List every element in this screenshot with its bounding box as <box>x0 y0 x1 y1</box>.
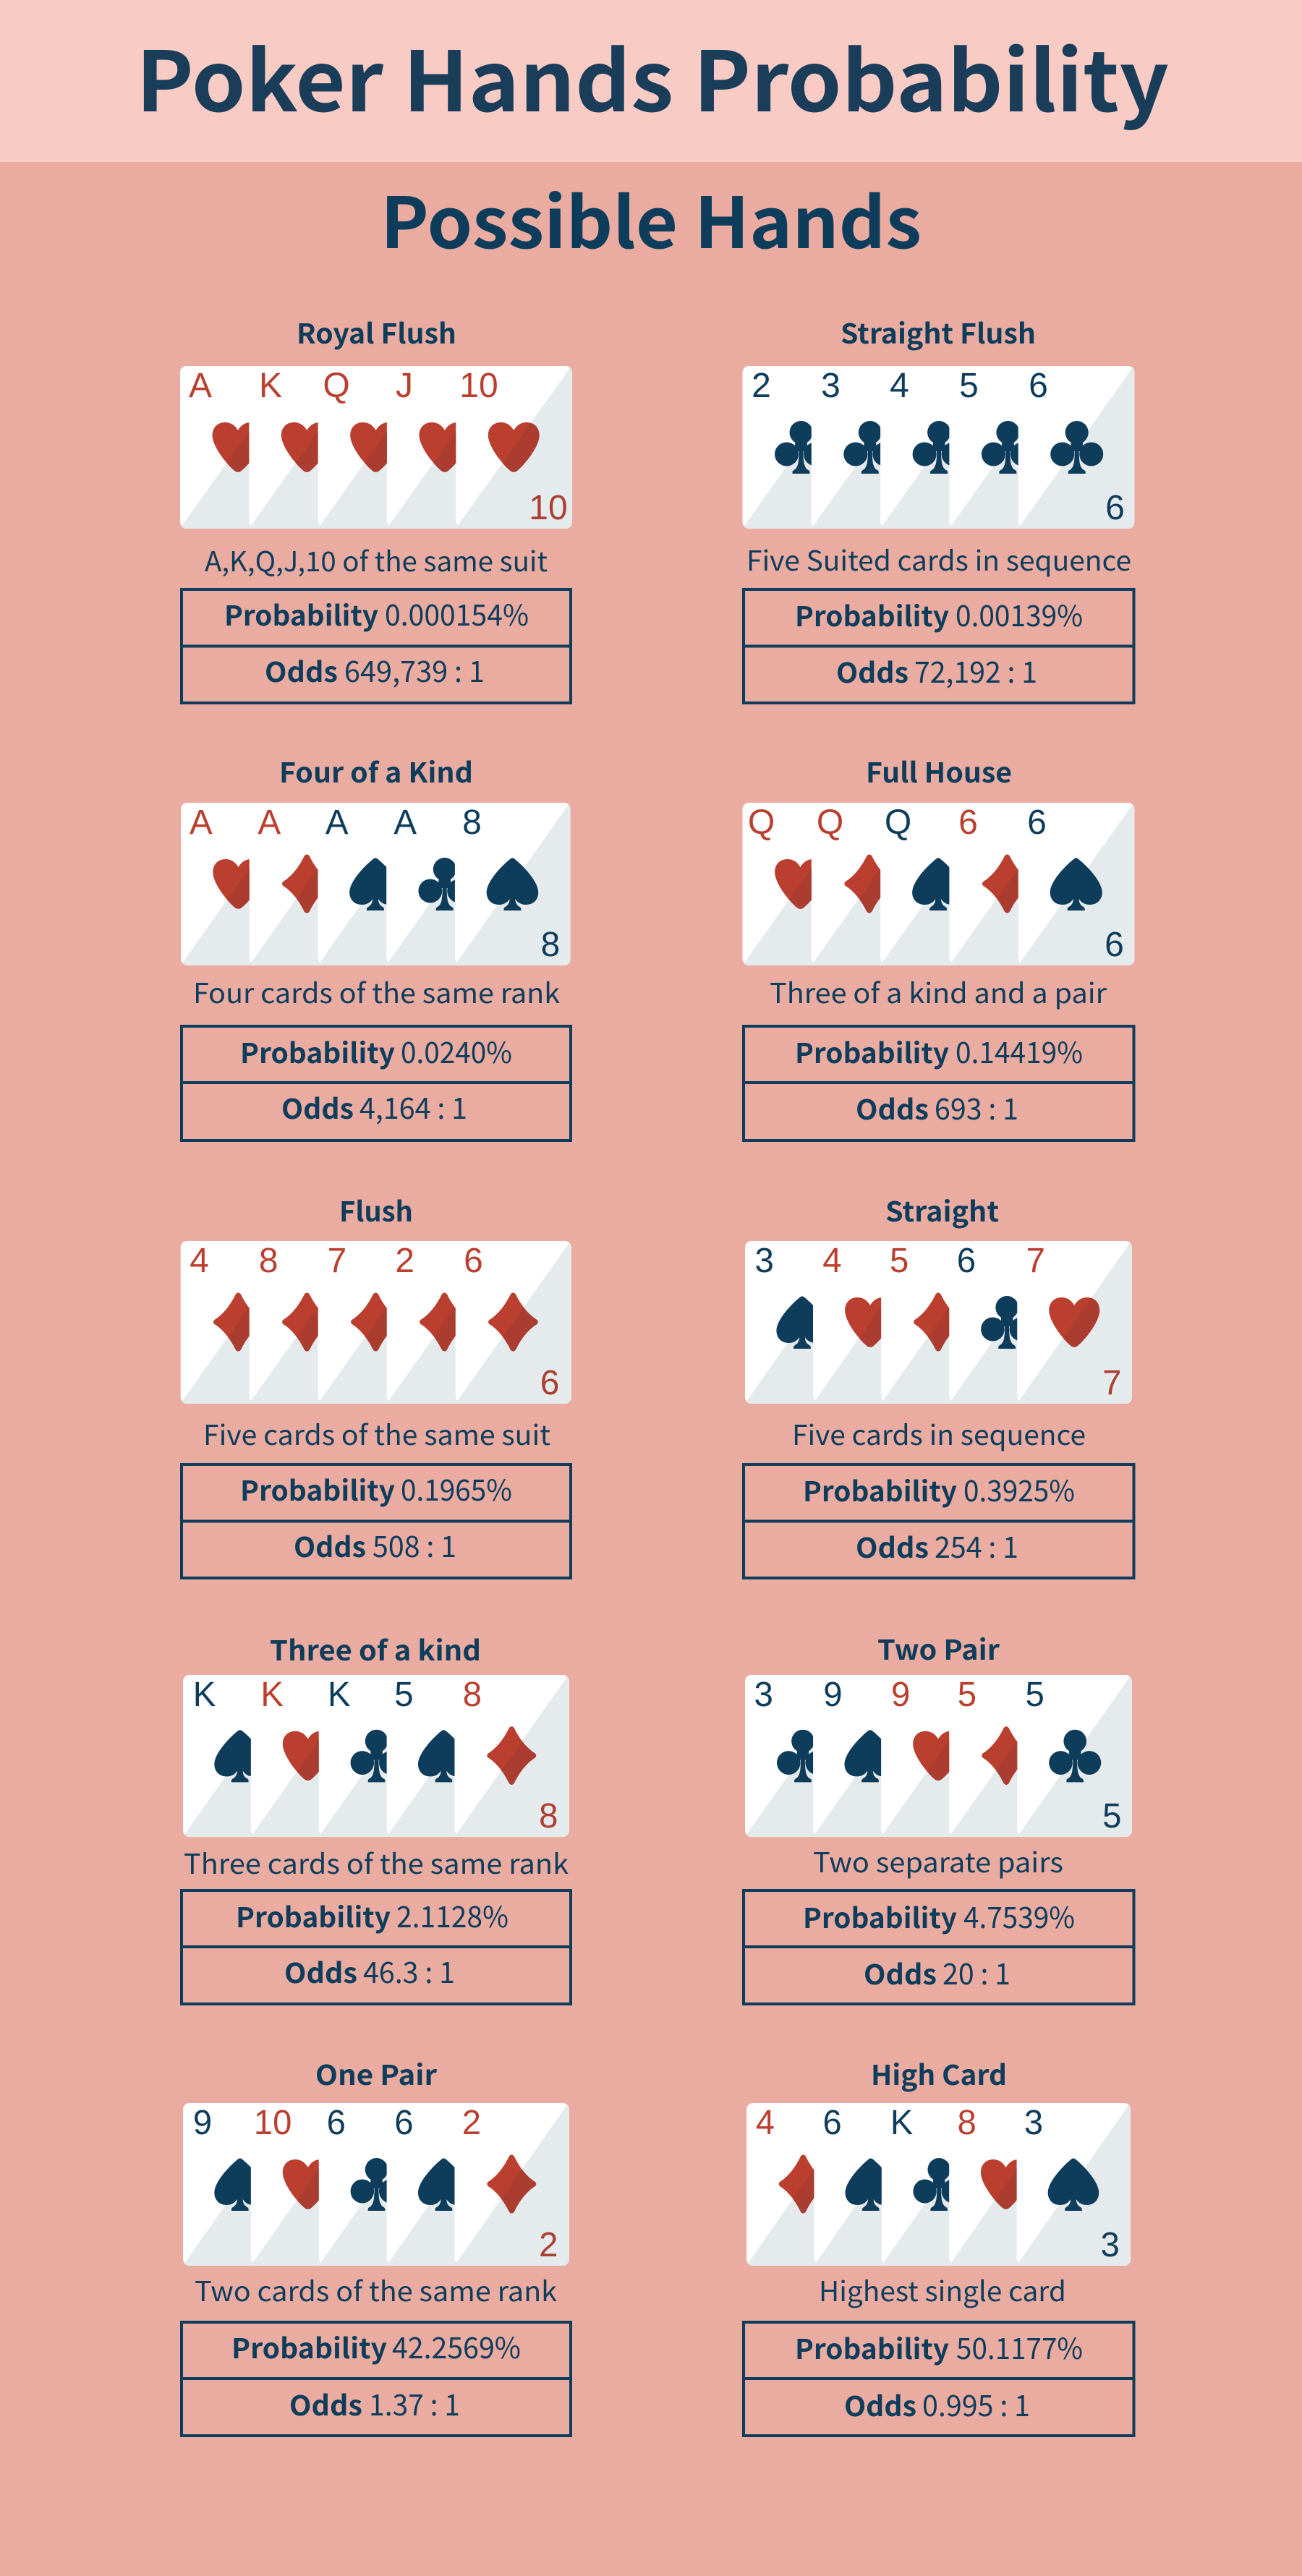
card: 10 of hearts: 10 <box>529 489 568 527</box>
stats table: Odds <box>281 1087 354 1127</box>
stats table: Odds <box>294 1525 366 1565</box>
stats table: 0.14419% <box>956 1029 1083 1072</box>
stats table <box>744 1026 1134 1140</box>
card: A of spades: A <box>326 803 349 842</box>
stats table: 254 : 1 <box>935 1524 1018 1566</box>
card: 9 of spades: 9 <box>823 1676 843 1714</box>
stats table <box>182 1464 571 1578</box>
card: 6 of clubs: 6 <box>1105 489 1125 527</box>
card: K of hearts: K <box>260 1676 284 1714</box>
heading: Straight Flush: Straight Flush <box>841 312 1036 351</box>
card: 4 of clubs <box>890 373 949 474</box>
description: Three cards of the same rank <box>184 1842 569 1882</box>
card: 10 of hearts: 10 <box>459 367 498 405</box>
card: 6 of diamonds: 6 <box>958 803 978 842</box>
card: 6 of spades <box>1027 803 1124 964</box>
panel: Three of a kind <box>182 1629 571 2004</box>
stats table <box>744 1464 1134 1578</box>
card: 4 of diamonds <box>756 2104 827 2213</box>
stats table: 0.00139% <box>956 592 1083 635</box>
card: K of spades <box>195 1682 251 1782</box>
card: 2 of clubs <box>754 373 812 474</box>
section heading: Possible Hands <box>380 166 922 268</box>
stats table: Probability <box>795 594 949 634</box>
stats table: Odds <box>844 2384 916 2424</box>
card: 8 of diamonds <box>260 1248 318 1351</box>
card: A of hearts: A <box>189 367 212 405</box>
stats table <box>744 589 1134 703</box>
card: 4 of clubs: 4 <box>890 367 909 405</box>
card: 6 of spades: 6 <box>822 2104 842 2142</box>
description: Highest single card <box>819 2269 1066 2309</box>
card hand: Royal Flush <box>180 366 572 529</box>
panel: Flush <box>181 1190 571 1578</box>
stats table: Probability <box>240 1031 395 1071</box>
description: Three of a kind and a pair <box>770 971 1107 1011</box>
card: Q of hearts: Q <box>323 367 350 405</box>
card: Q of diamonds: Q <box>817 803 843 842</box>
card: A of hearts: A <box>190 803 213 842</box>
stats table: 0.0240% <box>401 1029 512 1072</box>
description: A,K,Q,J,10 of the same suit <box>205 539 548 579</box>
description: Two separate pairs <box>813 1841 1063 1880</box>
heading: Four of a Kind: Four of a Kind <box>279 751 473 790</box>
card: 7 of diamonds: 7 <box>328 1242 346 1280</box>
card: 9 of hearts: 9 <box>891 1676 910 1714</box>
card: A of spades <box>326 810 386 910</box>
stats table: Odds <box>856 1526 929 1566</box>
stats table: 4,164 : 1 <box>359 1085 467 1127</box>
card: A of clubs <box>393 810 455 910</box>
card: 5 of diamonds: 5 <box>958 1676 977 1714</box>
stats table: Odds <box>864 1953 937 1992</box>
panel: Straight <box>744 1190 1134 1578</box>
stats table <box>182 1890 571 2004</box>
card: Q of hearts <box>324 372 387 472</box>
card: Q of hearts: Q <box>748 803 775 842</box>
card: 5 of diamonds: 5 <box>890 1242 909 1280</box>
card: Q of hearts <box>749 809 812 909</box>
card: A of diamonds <box>258 810 318 913</box>
card: 8 of diamonds: 8 <box>259 1242 278 1280</box>
card: Q of spades: Q <box>885 803 911 842</box>
card: 6 of spades: 6 <box>1027 803 1047 842</box>
stats table <box>182 2322 571 2436</box>
stats table <box>182 589 571 703</box>
stats table <box>744 1890 1134 2004</box>
card: A of clubs: A <box>393 803 417 842</box>
description: Five Suited cards in sequence <box>746 539 1131 579</box>
stats table: Odds <box>856 1088 929 1127</box>
stats table: Probability <box>795 2327 949 2367</box>
card: 2 of diamonds: 2 <box>462 2104 481 2142</box>
card: 5 of clubs: 5 <box>1102 1797 1121 1835</box>
card: 6 of spades: 6 <box>394 2104 413 2142</box>
card: 2 of clubs: 2 <box>752 367 771 405</box>
stats table: Probability <box>803 1896 957 1936</box>
card: 5 of diamonds <box>958 1676 1031 1785</box>
stats table: 50.1177% <box>956 2325 1083 2368</box>
card: K of clubs: K <box>890 2104 914 2142</box>
card: 6 of diamonds <box>961 810 1018 913</box>
stats table: 0.000154% <box>385 592 529 634</box>
card: 6 of clubs <box>958 1248 1017 1349</box>
card: 3 of spades: 3 <box>1024 2104 1043 2142</box>
card: K of clubs: K <box>328 1676 351 1714</box>
card: 8 of spades: 8 <box>541 926 560 964</box>
card: 6 of spades <box>394 2104 469 2211</box>
card: 8 of spades <box>462 803 560 964</box>
card: 10 of hearts <box>254 2104 333 2209</box>
card: K of hearts <box>262 373 318 472</box>
card: 4 of diamonds: 4 <box>190 1242 209 1280</box>
card: K of spades: K <box>193 1676 216 1714</box>
card: 7 of hearts: 7 <box>1102 1364 1121 1402</box>
stats table: 72,192 : 1 <box>914 649 1037 691</box>
card: 8 of diamonds <box>463 1676 558 1835</box>
stats table: Probability <box>224 594 378 634</box>
stats table: Odds <box>289 2384 362 2423</box>
card: 5 of spades: 5 <box>394 1676 413 1714</box>
description: Five cards of the same suit <box>203 1413 550 1453</box>
card: 3 of spades: 3 <box>1101 2226 1120 2264</box>
card: 5 of diamonds <box>891 1248 949 1351</box>
stats table: 0.1965% <box>401 1467 512 1509</box>
panel: High Card <box>744 2053 1134 2436</box>
title: Poker Hands Probability <box>136 16 1169 136</box>
card: K of hearts: K <box>259 367 282 405</box>
card: J of hearts: J <box>396 367 413 405</box>
card: 5 of spades <box>394 1676 469 1782</box>
stats table: 46.3 : 1 <box>363 1949 455 1992</box>
card: A of diamonds: A <box>258 803 281 842</box>
card hand: Two Pair <box>745 1675 1132 1837</box>
card: 8 of diamonds: 8 <box>463 1676 482 1714</box>
card: 7 of hearts: 7 <box>1026 1242 1045 1280</box>
card: 3 of spades: 3 <box>754 1242 774 1280</box>
card hand: Straight <box>745 1241 1132 1404</box>
card: 6 of clubs <box>327 2104 402 2211</box>
panel: Two Pair <box>744 1628 1134 2004</box>
stats table: Probability <box>231 2326 387 2366</box>
heading: Three of a kind: Three of a kind <box>270 1629 481 1668</box>
card: 9 of spades <box>823 1676 896 1782</box>
stats table: Odds <box>284 1951 357 1991</box>
card: 2 of diamonds: 2 <box>539 2226 558 2264</box>
heading: Royal Flush: Royal Flush <box>297 312 456 351</box>
card: 6 of spades <box>822 2104 896 2211</box>
card: 8 of hearts <box>958 2104 1031 2209</box>
card hand: High Card <box>746 2103 1131 2266</box>
card: K of clubs <box>890 2104 965 2211</box>
card: 8 of diamonds: 8 <box>539 1797 558 1835</box>
card: 4 of hearts: 4 <box>822 1242 842 1280</box>
card: Q of diamonds <box>818 809 881 913</box>
card: 3 of clubs <box>822 373 881 474</box>
card: 4 of hearts <box>823 1248 881 1347</box>
stats table: Probability <box>803 1470 957 1509</box>
card: 9 of spades <box>193 2104 265 2211</box>
stats table: 0.3925% <box>963 1467 1075 1510</box>
panel: One Pair <box>182 2053 571 2436</box>
stats table: Probability <box>795 1031 949 1071</box>
card: 6 of clubs: 6 <box>957 1242 976 1280</box>
card: 8 of hearts: 8 <box>958 2104 977 2142</box>
stats table: 0.995 : 1 <box>922 2382 1030 2425</box>
description: Five cards in sequence <box>792 1413 1086 1453</box>
description: Four cards of the same rank <box>193 971 560 1011</box>
card: 6 of clubs: 6 <box>327 2104 346 2142</box>
card hand: One Pair <box>183 2103 569 2266</box>
card: 3 of spades <box>756 1248 813 1349</box>
stats table: Odds <box>836 651 909 691</box>
card: 5 of clubs: 5 <box>1026 1676 1044 1714</box>
card: 2 of diamonds <box>396 1248 456 1351</box>
stats table <box>744 2322 1134 2436</box>
card: 8 of spades: 8 <box>462 803 482 842</box>
card: 6 of diamonds: 6 <box>464 1242 483 1280</box>
card: 5 of clubs <box>1026 1676 1121 1835</box>
card: 10 of hearts <box>459 367 568 527</box>
heading: Full House: Full House <box>866 751 1012 790</box>
card: 9 of hearts <box>891 1676 963 1780</box>
card: Q of spades <box>886 809 949 910</box>
card: 6 of diamonds: 6 <box>540 1364 559 1402</box>
card: 4 of diamonds: 4 <box>756 2104 775 2142</box>
card: J of hearts <box>396 373 456 472</box>
stats table: 693 : 1 <box>935 1086 1018 1128</box>
panel: Four of a Kind <box>181 751 571 1140</box>
card: 4 of diamonds <box>190 1248 250 1351</box>
card: 6 of diamonds <box>464 1242 559 1402</box>
card: K of hearts <box>263 1682 319 1780</box>
card: 3 of spades <box>1024 2104 1120 2264</box>
card: 5 of clubs <box>961 373 1018 474</box>
card: 6 of clubs: 6 <box>1029 367 1048 405</box>
card: 3 of clubs: 3 <box>754 1676 773 1714</box>
card: 7 of diamonds <box>329 1248 387 1351</box>
heading: One Pair: One Pair <box>315 2053 437 2093</box>
card: A of hearts <box>190 810 250 909</box>
card: 3 of clubs: 3 <box>821 367 841 405</box>
stats table: 1.37 : 1 <box>369 2381 460 2424</box>
stats table: Probability <box>240 1469 395 1509</box>
stats table: Odds <box>265 650 338 690</box>
card hand: Full House <box>742 803 1134 965</box>
card hand: Flush <box>181 1241 571 1404</box>
card: 5 of clubs: 5 <box>959 367 979 405</box>
heading: Two Pair: Two Pair <box>877 1628 1000 1668</box>
card: K of clubs <box>328 1676 402 1782</box>
card hand: Three of a kind <box>183 1675 569 1837</box>
stats table: Probability <box>236 1895 391 1935</box>
stats table: 42.2569% <box>392 2324 521 2367</box>
card: 7 of hearts <box>1026 1242 1121 1402</box>
card: 6 of spades: 6 <box>1105 926 1124 964</box>
card: 6 of clubs <box>1029 367 1125 527</box>
header band <box>0 0 1302 162</box>
heading: High Card: High Card <box>871 2053 1007 2093</box>
stats table: 649,739 : 1 <box>344 648 485 691</box>
card: 3 of clubs <box>754 1676 829 1782</box>
card: 2 of diamonds <box>462 2104 558 2264</box>
stats table: 2.1128% <box>396 1893 509 1936</box>
panel: Royal Flush <box>180 312 572 703</box>
card: 9 of spades: 9 <box>193 2104 212 2142</box>
stats table <box>182 1026 571 1140</box>
stats table: 4.7539% <box>963 1894 1075 1937</box>
panel: Straight Flush <box>742 312 1134 703</box>
card: A of hearts <box>189 373 249 472</box>
stats table: 20 : 1 <box>943 1950 1010 1993</box>
card: 2 of diamonds: 2 <box>395 1242 414 1280</box>
card hand: Four of a Kind <box>181 803 571 965</box>
heading: Flush: Flush <box>339 1190 413 1229</box>
heading: Straight: Straight <box>885 1190 999 1229</box>
card: 10 of hearts: 10 <box>254 2104 292 2142</box>
stats table: 508 : 1 <box>373 1523 456 1566</box>
card hand: Straight Flush <box>742 366 1134 529</box>
panel: Full House <box>742 751 1134 1140</box>
description: Two cards of the same rank <box>195 2269 557 2309</box>
